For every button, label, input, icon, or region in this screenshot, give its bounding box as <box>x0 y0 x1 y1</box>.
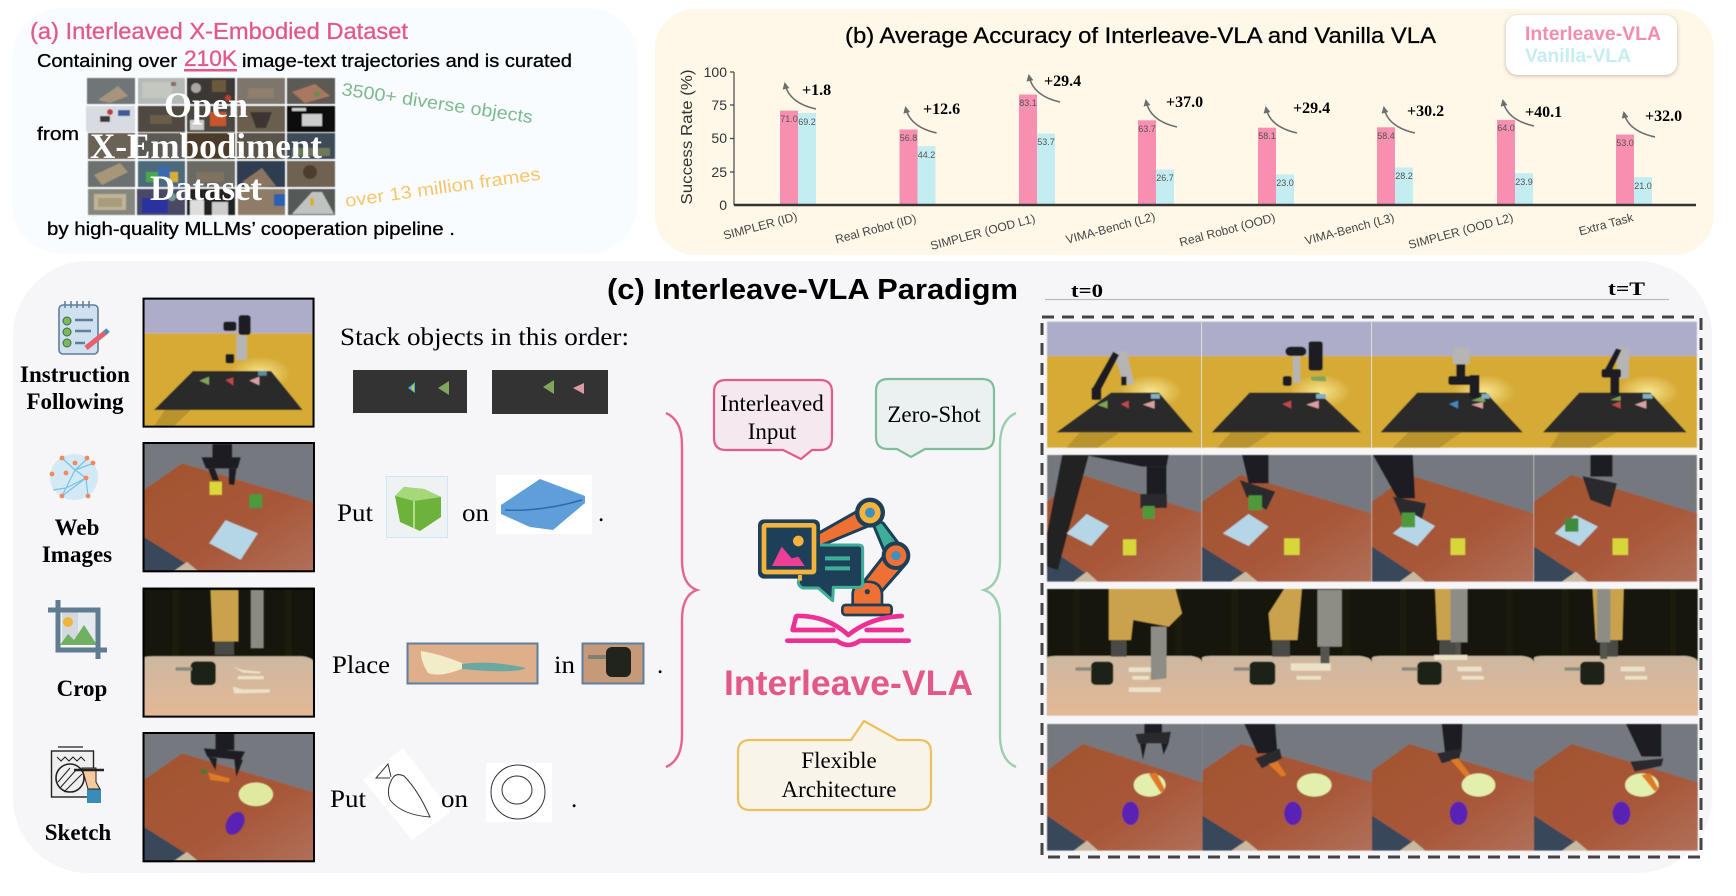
value labels: 58.4 <box>1377 131 1395 141</box>
image mosaic with overlay title <box>86 78 335 215</box>
label: web images: Images <box>42 542 112 567</box>
text: period: . <box>571 786 577 813</box>
value labels: 64.0 <box>1497 123 1515 133</box>
text: on: on <box>462 500 490 527</box>
panel b heading: (b) Average Accuracy of Interleave-VLA and Vanilla VLA <box>845 23 1436 48</box>
gain values: +37.0 <box>1166 94 1203 111</box>
legend <box>1506 15 1677 75</box>
label: instruction following: Following <box>26 389 124 414</box>
photo: web images scene <box>143 443 314 572</box>
text: on: on <box>441 786 469 813</box>
callout: zero-shot <box>876 379 994 457</box>
icon: globe <box>50 454 98 500</box>
bracket: inputs <box>666 413 697 767</box>
timeline end label: t=T <box>1608 279 1645 300</box>
image: stack order second <box>492 370 608 414</box>
value labels: 44.2 <box>918 150 935 160</box>
legend: Interleave-VLA <box>1525 24 1661 45</box>
icon: robot arm with image and book <box>759 498 910 645</box>
category labels: Real Robot (ID) <box>834 211 918 246</box>
image mosaic with overlay title: X-Embodiment <box>90 126 322 166</box>
text: period: . <box>657 652 663 679</box>
gain values: +1.8 <box>802 82 831 99</box>
label: web images <box>42 515 112 567</box>
dataset description last line: by high-quality MLLMs’ cooperation pipeline . <box>47 219 455 239</box>
value labels: 56.8 <box>900 133 917 143</box>
y axis: 75 <box>711 97 727 113</box>
value labels: 23.9 <box>1515 177 1533 187</box>
image row: pick and place cube <box>1047 455 1697 582</box>
gain values: +30.2 <box>1407 103 1444 120</box>
photo: crop scene <box>143 588 314 717</box>
image: plate sketch <box>486 763 552 822</box>
category labels: SIMPLER (OOD L1) <box>929 211 1037 253</box>
dashed frame: trajectories <box>1042 317 1701 857</box>
image: spoon crop <box>408 644 538 684</box>
bars <box>780 94 1652 205</box>
y axis <box>679 64 734 213</box>
value labels: 53.0 <box>1616 138 1634 148</box>
text: place: Place <box>332 652 390 679</box>
bar chart <box>679 64 1696 253</box>
category labels: VIMA-Bench (L2) <box>1064 209 1157 247</box>
value labels: 28.2 <box>1395 171 1413 181</box>
bracket: outputs <box>984 413 1016 767</box>
gain values <box>802 73 1682 125</box>
legend: Vanilla-VLA <box>1525 46 1631 67</box>
value labels: 63.7 <box>1138 124 1156 134</box>
gain values: +12.6 <box>923 101 960 118</box>
gain values: +29.4 <box>1293 100 1330 117</box>
label: crop: Crop <box>57 676 107 701</box>
label: instruction following: Instruction <box>20 362 130 387</box>
text: put: Put <box>337 500 373 527</box>
image: pot crop <box>582 644 644 684</box>
value labels: 23.0 <box>1276 178 1294 188</box>
callout: flexible architecture: Architecture <box>782 777 896 802</box>
value labels: 58.1 <box>1258 131 1276 141</box>
category labels: Real Robot (OOD) <box>1178 210 1277 249</box>
text: put: Put <box>330 786 366 813</box>
image row: simulator stacking <box>1047 322 1697 448</box>
x axis baseline <box>734 204 1696 206</box>
gain values: +40.1 <box>1525 104 1562 121</box>
image: blue towel <box>496 475 592 534</box>
image row: carrot on plate <box>1047 724 1698 851</box>
value labels: 21.0 <box>1634 181 1652 191</box>
from label: from <box>37 124 79 144</box>
image: carrot sketch <box>363 748 451 840</box>
category labels <box>722 209 1636 253</box>
dataset description line 1: image-text trajectories and is curated <box>242 51 572 71</box>
text: in: in <box>554 652 576 679</box>
instruction text: Stack objects in this order: <box>340 324 629 351</box>
gain values: +32.0 <box>1645 108 1682 125</box>
image mosaic with overlay title: Open <box>164 85 248 125</box>
callout: interleaved input: Interleaved <box>720 391 824 416</box>
callout: flexible architecture: Flexible <box>801 748 877 773</box>
photo: sketch scene <box>143 733 314 862</box>
image row: spoon into pot <box>1047 589 1698 716</box>
image: green cube <box>386 476 448 538</box>
image: stack order first <box>353 370 467 413</box>
timeline start label: t=0 <box>1071 281 1103 302</box>
value labels: 53.7 <box>1037 137 1055 147</box>
category labels: Extra Task <box>1577 210 1636 238</box>
icon: checklist <box>59 301 108 354</box>
panel: average accuracy <box>655 9 1714 255</box>
icon: crop <box>48 600 107 659</box>
y axis: 50 <box>711 130 727 146</box>
panel a heading: (a) Interleaved X-Embodied Dataset <box>30 18 409 44</box>
dataset description line 1: Containing over <box>37 51 177 71</box>
dataset description line 1: 210K <box>184 46 237 71</box>
image mosaic with overlay title: Dataset <box>150 168 262 208</box>
value labels: 69.2 <box>798 117 816 127</box>
panel: interleaved dataset <box>12 8 638 254</box>
text: period: . <box>598 500 604 527</box>
callout: zero-shot: Zero-Shot <box>887 402 981 427</box>
callout: flexible architecture <box>738 721 931 810</box>
gain arrows <box>785 76 1655 137</box>
note: diverse objects: 3500+ diverse objects <box>340 79 534 127</box>
callout: interleaved input: Input <box>748 419 797 444</box>
label: instruction following <box>20 362 130 414</box>
callout: interleaved input <box>714 380 832 459</box>
icon: sketch <box>52 747 104 803</box>
photo: instruction scene <box>143 298 314 427</box>
value labels: 26.7 <box>1156 173 1174 183</box>
panel: paradigm <box>13 261 1712 873</box>
value labels <box>780 98 1652 191</box>
category labels: SIMPLER (ID) <box>722 209 799 243</box>
value labels: 83.1 <box>1019 98 1037 108</box>
label: sketch: Sketch <box>45 820 111 845</box>
y axis: 100 <box>704 64 727 80</box>
value labels: 71.0 <box>780 114 798 124</box>
dataset description line 1 <box>37 46 572 72</box>
y axis: Success Rate (%) <box>679 70 696 204</box>
panel c heading: (c) Interleave-VLA Paradigm <box>607 274 1018 306</box>
gain values: +29.4 <box>1044 73 1081 90</box>
y axis: 0 <box>719 197 727 213</box>
y axis: 25 <box>711 164 727 180</box>
brand label: Interleave-VLA <box>724 664 973 703</box>
category labels: SIMPLER (OOD L2) <box>1407 210 1515 252</box>
label: web images: Web <box>55 515 99 540</box>
note: frames: over 13 million frames <box>344 164 542 211</box>
category labels: VIMA-Bench (L3) <box>1303 210 1396 248</box>
